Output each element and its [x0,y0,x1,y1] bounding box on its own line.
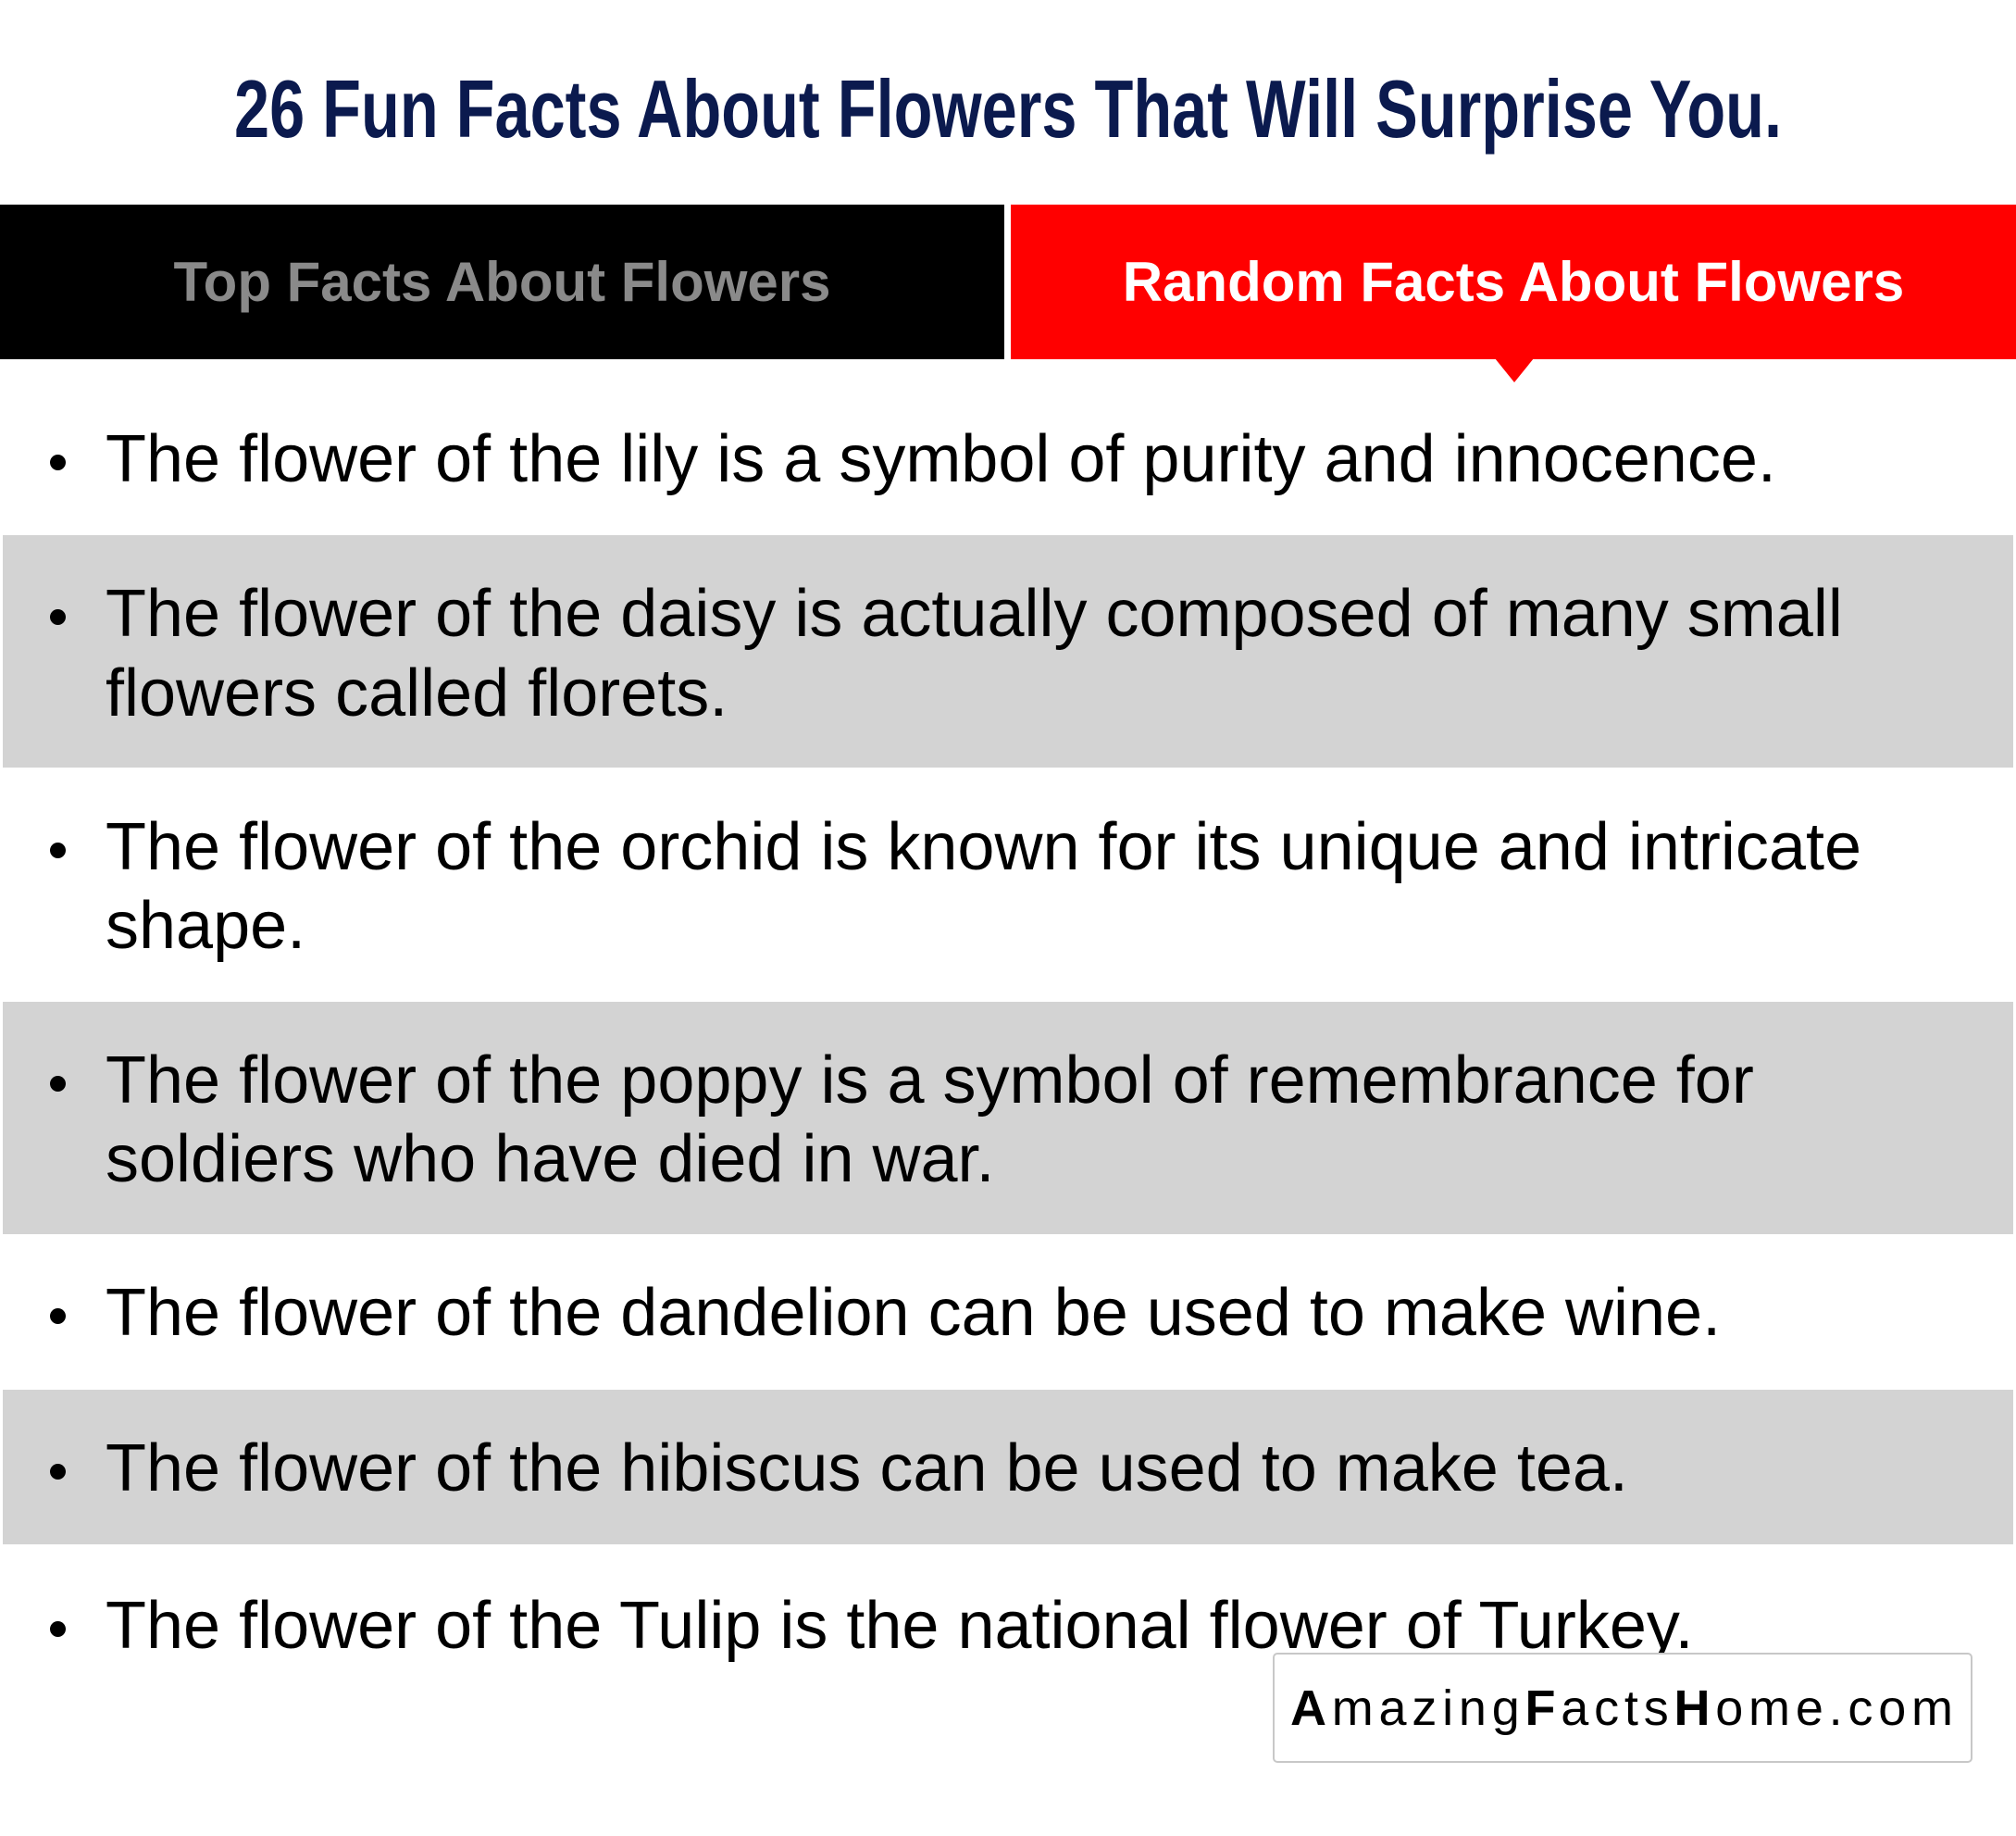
text: The flower of the poppy is a symbol of remembrance for [106,1043,1754,1118]
fact 4 [50,1043,1754,1196]
text: soldiers who have died in war. [106,1122,995,1196]
logo box [1273,1653,1972,1763]
fact 3 [50,810,1861,963]
text: The flower of the dandelion can be used to make wine. [106,1276,1721,1350]
text: shape. [106,889,305,963]
fact 1 [50,422,1776,496]
text: The flower of the lily is a symbol of purity and innocence. [106,422,1776,496]
tab: random facts (active): Random Facts About Flowers [1123,251,1904,313]
logo box: AmazingFactsHome.com [1290,1680,1953,1736]
text: flowers called florets. [106,656,728,731]
fact 2 [50,577,1843,731]
text: The flower of the Tulip is the national flower of Turkey. [106,1589,1694,1663]
pointer arrow [1495,358,1534,382]
row backgrounds [3,535,2013,768]
fact 6 [50,1431,1628,1505]
fact 7 [50,1589,1694,1663]
tab: random facts (active) [1011,205,2016,359]
tab: top facts: Top Facts About Flowers [173,251,831,313]
text: The flower of the hibiscus can be used to make tea. [106,1431,1628,1505]
text: The flower of the orchid is known for its unique and intricate [106,810,1861,884]
tab: top facts [0,205,1004,359]
fact 5 [50,1276,1721,1350]
text: The flower of the daisy is actually composed of many small [106,577,1843,651]
